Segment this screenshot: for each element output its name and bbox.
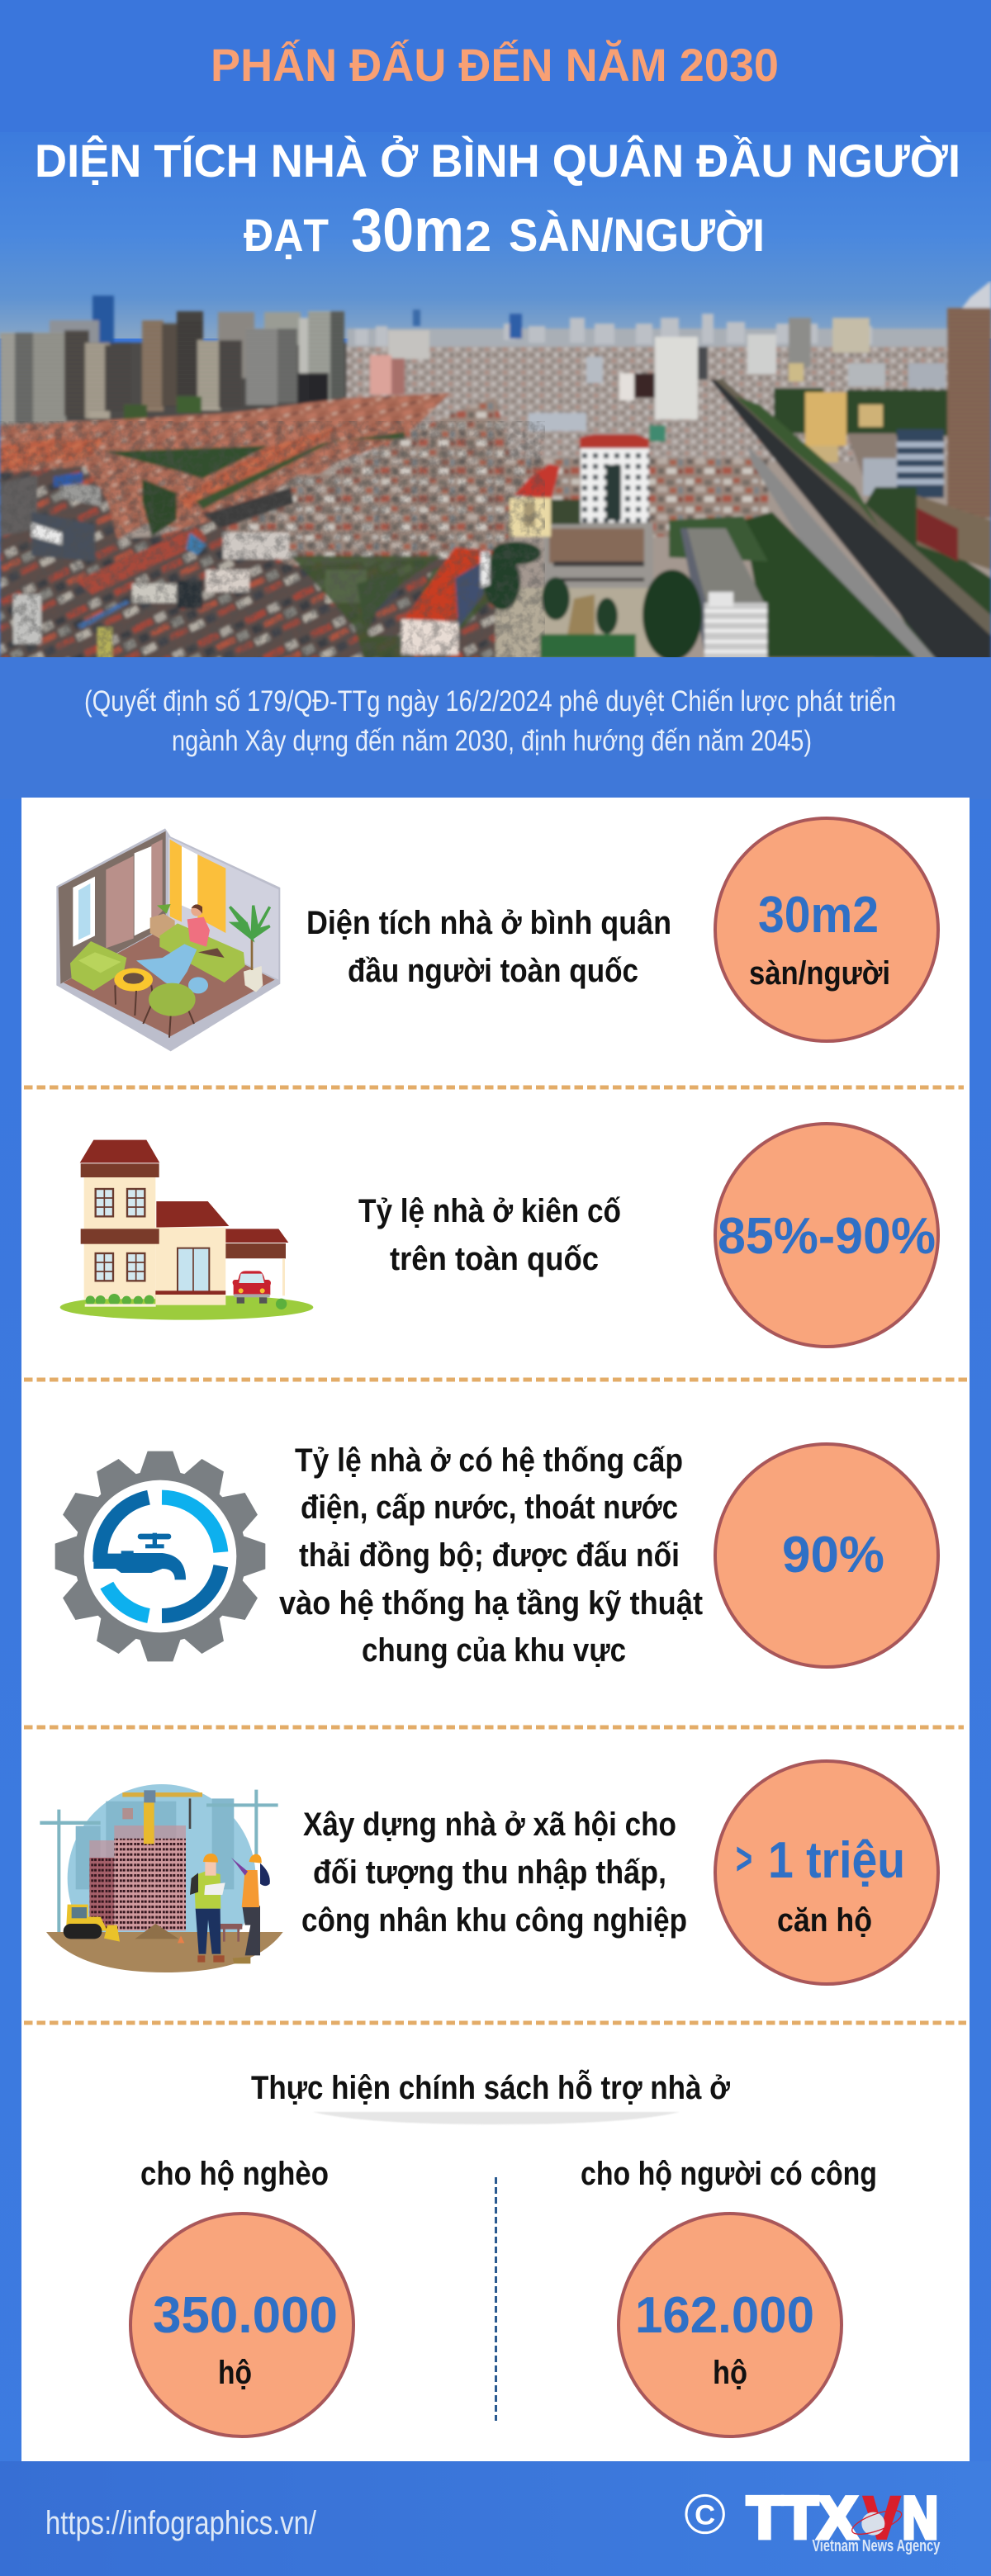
label: average floor area: đầu người toàn quốc: [348, 953, 638, 989]
footer url: https://infographics.vn/: [45, 2505, 317, 2541]
stat circle: 85%-90%: 85%-90%: [718, 1208, 936, 1265]
label: utilities: thải đồng bộ; được đấu nối: [299, 1537, 680, 1574]
big red roof: [405, 547, 493, 622]
icon: house with car: [60, 1140, 313, 1320]
icon: construction site: [40, 1784, 283, 1972]
stat circle: 30m2: [715, 818, 938, 1041]
heading shadow: [313, 2112, 680, 2124]
sub heading: meritorious households: cho hộ người có công: [581, 2156, 877, 2192]
label: average floor area: [306, 905, 671, 989]
panel: header with city photo: [0, 132, 991, 661]
heading line 2: 2: [465, 213, 491, 261]
logo: TTXVN: TTX: [747, 2485, 857, 2551]
stat circle: 90%: [715, 1444, 938, 1667]
heading line 2: SÀN/NGƯỜI: [509, 209, 765, 261]
silver long building: [685, 528, 767, 608]
photo: city skyline of Hanoi: [0, 281, 991, 661]
sky behind the title: [0, 132, 991, 339]
divider 4: [24, 2021, 966, 2024]
label: social housing: công nhân khu công nghiệp: [301, 1902, 687, 1939]
copyright mark: C: [695, 2499, 715, 2531]
photo texture: [0, 421, 545, 661]
stat circle: 162.000 households: [619, 2214, 842, 2436]
icon: isometric living room: [56, 828, 280, 1051]
panel: row 2 solid houses: [60, 1124, 938, 1347]
stat circle: over 1 million apartments: [715, 1761, 938, 1984]
band below photo: [0, 657, 991, 799]
heading line 2: [244, 196, 765, 264]
stat circle: 350.000 households: hộ: [218, 2355, 252, 2391]
stat circle: 162.000 households: 162.000: [635, 2287, 814, 2344]
divider 3: [24, 1726, 964, 1729]
road and elevated metro line: [747, 446, 937, 661]
panel: row 3 utilities: [55, 1442, 938, 1669]
stat circle: over 1 million apartments: 1 triệu: [768, 1832, 905, 1889]
stat circle: 350.000 households: [130, 2214, 353, 2436]
panel: row 4 social housing: [40, 1761, 938, 1984]
label: utilities: [279, 1442, 703, 1669]
label: social housing: Xây dựng nhà ở xã hội cho: [303, 1807, 676, 1843]
heading line 2: 30m: [351, 196, 464, 264]
title: Phấn đấu đến năm 2030: PHẤN ĐẤU ĐẾN NĂM 2030: [211, 39, 779, 91]
white building with red roof: [581, 446, 649, 523]
label: utilities: điện, cấp nước, thoát nước: [301, 1489, 678, 1526]
sub heading: poor households: cho hộ nghèo: [140, 2156, 329, 2192]
stat circle: 85%-90%: [715, 1124, 938, 1347]
worker right: [231, 1854, 270, 1963]
vertical dashed divider: [495, 2177, 497, 2421]
label: solid houses: trên toàn quốc: [390, 1241, 599, 1277]
red roof district: [0, 393, 450, 528]
stat circle: 350.000 households: 350.000: [153, 2287, 338, 2344]
yellow building with red roof: [514, 464, 560, 498]
stat circle: 30m2: 30m2: [758, 887, 879, 944]
label: utilities: chung của khu vực: [362, 1632, 626, 1669]
yellow buildings: [805, 392, 846, 446]
label: utilities: Tỷ lệ nhà ở có hệ thống cấp: [295, 1442, 683, 1479]
label: social housing: [301, 1807, 687, 1939]
trees behind yellow buildings: [774, 388, 823, 433]
label: average floor area: Diện tích nhà ở bình quân: [306, 905, 671, 941]
label: utilities: vào hệ thống hạ tầng kỹ thuật: [279, 1585, 703, 1622]
citation text: ngành Xây dựng đến năm 2030, định hướng đến năm 2045): [172, 725, 812, 757]
citation text: [84, 685, 896, 757]
heading line 2: ĐẠT: [244, 209, 329, 261]
section heading: Thực hiện chính sách hỗ trợ nhà ở: [251, 2068, 730, 2106]
label: solid houses: Tỷ lệ nhà ở kiên cố: [358, 1193, 621, 1229]
heading line 1: DIỆN TÍCH NHÀ Ở BÌNH QUÂN ĐẦU NGƯỜI: [35, 135, 960, 187]
divider 1: [24, 1085, 964, 1090]
stat circle: over 1 million apartments: căn hộ: [777, 1902, 872, 1939]
football field: [540, 634, 636, 659]
worker left: [190, 1854, 225, 1963]
footer band: [0, 2461, 991, 2576]
icon: gear with water tap: [55, 1451, 265, 1661]
label: social housing: đối tượng thu nhập thấp,: [313, 1854, 666, 1891]
stat circle: over 1 million apartments: >: [736, 1832, 752, 1884]
dark trees: [642, 570, 702, 661]
label: solid houses: [358, 1193, 621, 1277]
copyright mark: [686, 2495, 723, 2533]
stat circle: 162.000 households: hộ: [713, 2355, 747, 2391]
logo: TTXVN: Vietnam News Agency: [812, 2537, 940, 2555]
stat circle: 30m2: sàn/người: [749, 955, 890, 992]
grey building with brown top: [545, 522, 656, 586]
logo: TTXVN: N: [903, 2485, 938, 2551]
logo: TTXVN: V: [864, 2485, 900, 2551]
logo: TTXVN: [686, 2485, 940, 2555]
towers left: [0, 296, 405, 425]
divider 2: [24, 1377, 967, 1382]
panel: housing support policy: [130, 2068, 877, 2436]
tree lines along metro: [735, 396, 880, 528]
white main panel: [21, 798, 970, 2461]
city middle right: [655, 337, 698, 419]
panel: row 1 average floor area: [56, 818, 938, 1051]
stat circle: 90%: 90%: [782, 1527, 884, 1584]
